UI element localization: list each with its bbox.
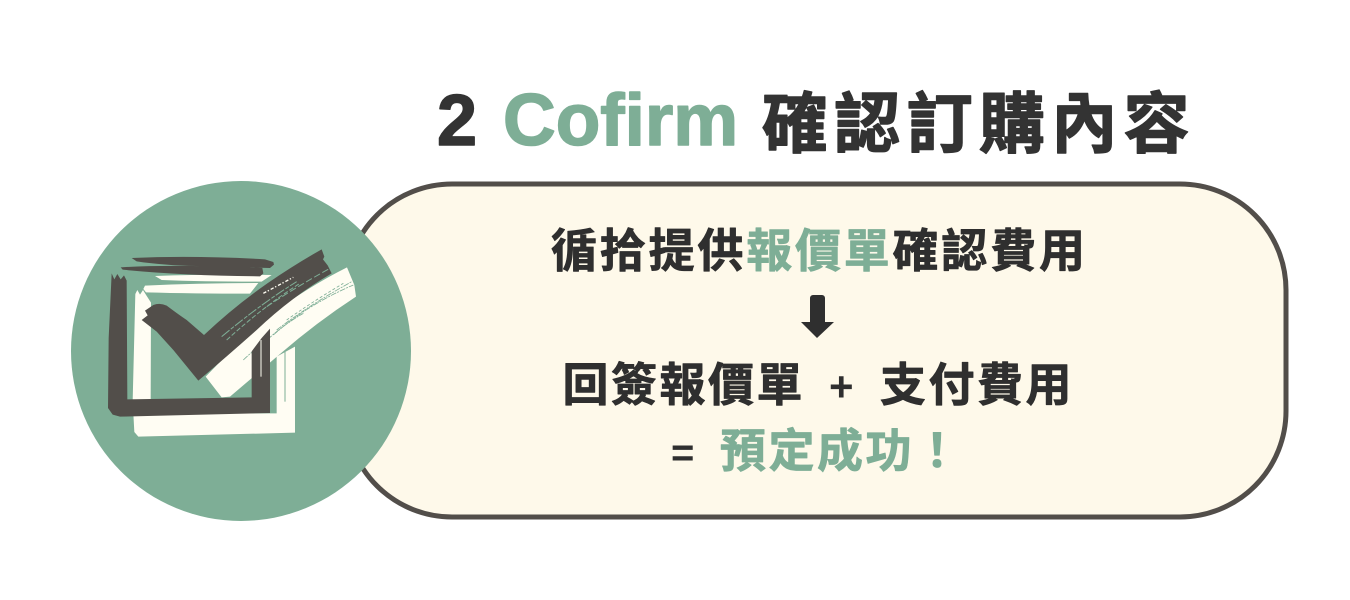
title [437, 71, 1196, 167]
text: plus sign: + [829, 363, 854, 410]
title: 2 [437, 81, 477, 161]
dark box [108, 273, 270, 417]
icon circle background [71, 181, 411, 521]
dark check cream flecks [263, 277, 293, 293]
title: Cofirm [503, 80, 738, 161]
cream check [206, 267, 356, 397]
text: step one: 循拾提供報價單確認費用 [551, 215, 1088, 281]
icon: brush check box [108, 249, 356, 437]
dark top strokes [121, 257, 274, 276]
icon: down arrow [801, 295, 834, 338]
cream top strokes [143, 275, 272, 294]
cream box [133, 290, 295, 437]
panel: confirmation steps [346, 184, 1286, 517]
dark check green streaks [222, 268, 330, 340]
dark check [142, 249, 332, 381]
text: step two: 回簽報價單 [562, 349, 805, 415]
text: equals sign: = [671, 431, 694, 475]
title: 確認訂購內容 [762, 71, 1196, 167]
text: booking success: 預定成功！ [720, 415, 962, 481]
text: pay fee: 支付費用 [880, 349, 1074, 415]
cream check green flecks [243, 282, 353, 360]
